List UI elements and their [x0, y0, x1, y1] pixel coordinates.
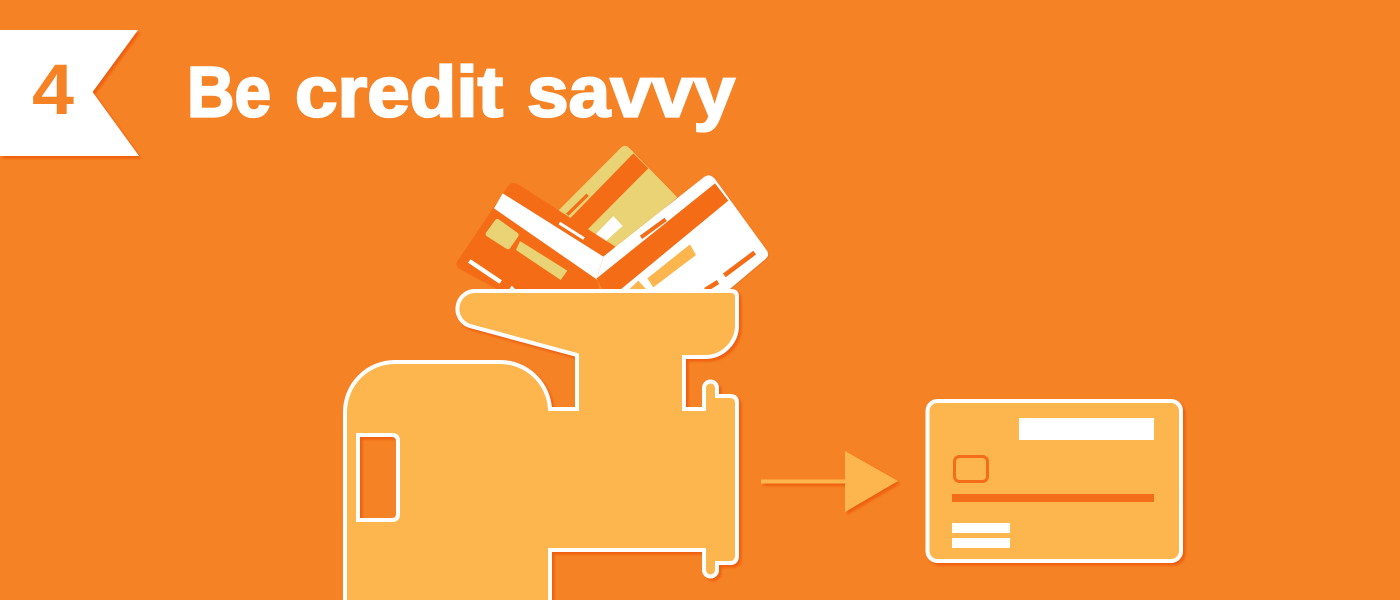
title: [187, 54, 736, 132]
card number bar: [952, 494, 1154, 502]
title: savvy: [527, 54, 736, 132]
card chip: [954, 456, 988, 482]
hand holding cards: [345, 291, 737, 600]
front orange card: [456, 183, 615, 297]
badge number: 4: [32, 51, 75, 130]
credit cards fan: [456, 146, 768, 297]
arrow: [761, 451, 898, 512]
arrow head: [845, 451, 898, 512]
single credit card: [928, 401, 1181, 561]
card detail lines: [952, 523, 1010, 548]
arrow shaft: [761, 480, 847, 484]
card body: [928, 401, 1181, 561]
badge ribbon: [0, 30, 139, 156]
card white label: [1019, 418, 1154, 440]
front white card: [597, 175, 768, 292]
number badge: [0, 30, 139, 156]
title: Be: [187, 54, 271, 132]
title: credit: [295, 54, 503, 132]
back yellow card: [558, 146, 677, 252]
